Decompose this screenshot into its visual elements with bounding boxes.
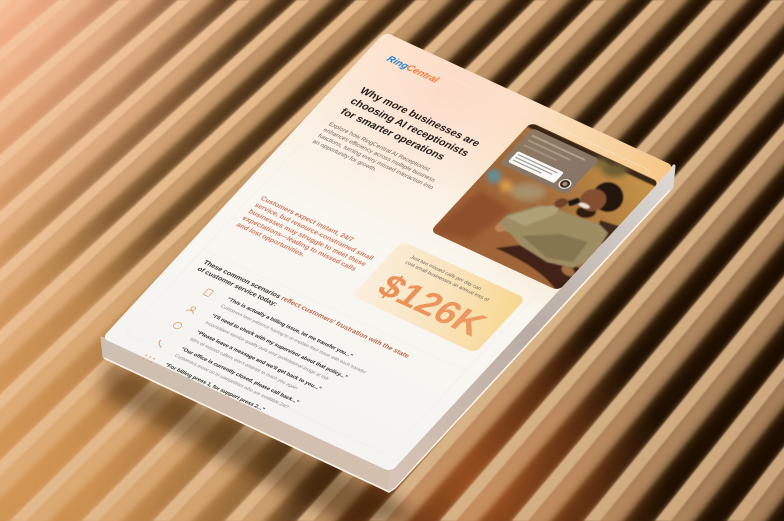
stat callout xyxy=(352,241,526,353)
orange problem statement: service, but resource-constrained small xyxy=(253,202,375,262)
orange problem statement: expectations—leading to missed calls xyxy=(240,215,358,273)
scenario 5: “For billing press 1, for support press 2...” xyxy=(163,362,266,413)
title: choosing AI receptionists xyxy=(347,96,472,159)
document: stacked brochure mockup xyxy=(102,32,674,492)
scenario 1: “This is actually a billing issue, let me transfer you...” xyxy=(225,297,354,359)
icon: person xyxy=(186,305,198,314)
man's neck and beard xyxy=(576,206,596,218)
scenario 4: Customers move on to competitors who are available 24/7 xyxy=(173,353,290,410)
intro paragraph: functions, turning every missed interaction into xyxy=(316,133,436,191)
scenario 2 xyxy=(182,304,349,387)
stat callout: cost small businesses an annual loss of xyxy=(403,260,491,303)
sofa and foreground xyxy=(450,243,562,300)
title: for smarter operations xyxy=(338,106,448,163)
scenario 3: 80% of missed callers won't attempt to reach you again xyxy=(188,337,299,391)
phone and hands xyxy=(567,197,581,207)
intro paragraph: enhances efficiency across multiple business xyxy=(321,127,437,184)
scenario 4 xyxy=(153,337,300,412)
photo: man on phone on sofa xyxy=(433,124,656,289)
intro paragraph xyxy=(311,121,446,197)
intro paragraph: Explore how RingCentral AI Receptionist xyxy=(327,121,432,173)
orange problem statement: Customers expect instant, 24/7 xyxy=(259,196,355,243)
intro paragraph: an opportunity for growth. xyxy=(311,139,379,173)
stat callout: Just two missed calls per day can xyxy=(408,255,483,292)
icon: phone xyxy=(156,340,166,347)
hair xyxy=(592,182,624,212)
document drop shadow xyxy=(100,360,420,521)
icon: speech bubble xyxy=(172,321,183,330)
document page face xyxy=(102,32,674,472)
orange problem statement: and lost opportunities. xyxy=(234,222,306,258)
scenario 5 xyxy=(143,353,266,413)
orange problem statement xyxy=(234,196,381,282)
dark tablet frame edge xyxy=(527,122,660,187)
scenarios heading: These common scenarios reflect customers' frustration with the state xyxy=(201,260,411,360)
scenario 2: “I'll need to check with my supervisor about that policy...” xyxy=(210,313,349,380)
title xyxy=(338,86,483,170)
man's face xyxy=(578,188,608,212)
man's torso xyxy=(495,205,608,268)
big number: $126K xyxy=(369,267,495,343)
scenario 4: “Our office is currently closed, please call back...” xyxy=(179,347,300,405)
chat bubble xyxy=(508,151,564,183)
scenario 3 xyxy=(167,320,323,399)
orange problem statement: businesses may struggle to meet these xyxy=(246,209,367,268)
scenario 1 xyxy=(199,288,374,375)
scenario 3: “Please leave a message and we'll get back to you...” xyxy=(194,330,323,392)
chat overlay panel xyxy=(500,128,599,195)
RingCentral logo: RingCentral xyxy=(384,54,441,85)
scenario 1: Customers lose patience having to re-explain their issue with each transfer xyxy=(219,304,368,375)
scenario 2: Inconsistent service quality puts your professional image at risk xyxy=(203,320,331,382)
icon: keypad dots xyxy=(143,355,155,362)
document edge thickness xyxy=(102,166,674,492)
background bokeh xyxy=(430,158,628,240)
agent avatar xyxy=(556,177,574,191)
scenarios heading: of customer service today: xyxy=(195,266,279,308)
icon: document xyxy=(203,289,214,297)
title: Why more businesses are xyxy=(357,86,483,149)
